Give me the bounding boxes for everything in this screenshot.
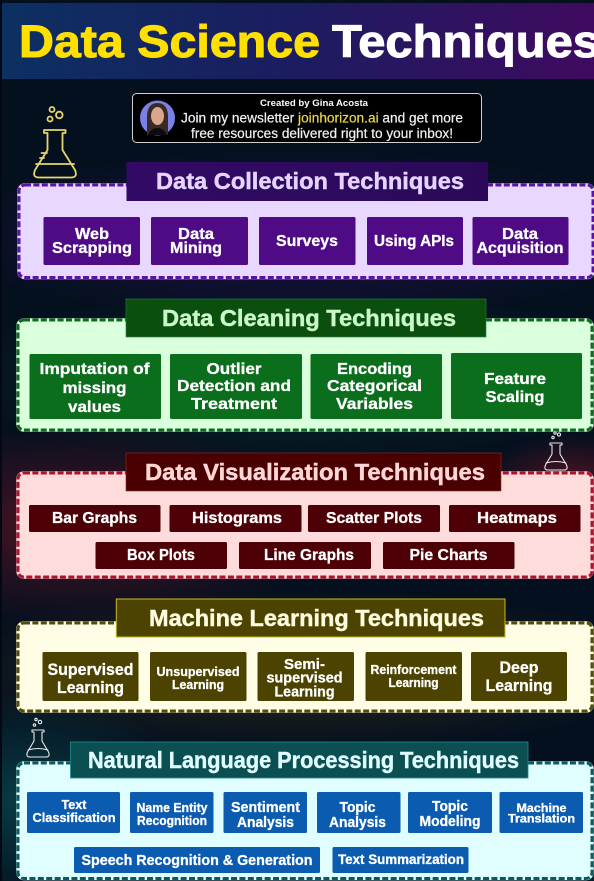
heading: machine learning: Machine Learning Techniques [149,605,484,631]
item: data mining [151,217,248,265]
item: feature scaling: Feature [484,371,546,388]
heading: machine learning [116,599,505,637]
item: feature scaling [451,353,582,419]
item: topic modeling: Topic [432,799,468,815]
item: box plots [96,542,227,569]
icon: white flask left [27,718,49,757]
item: pie charts: Pie Charts [410,547,488,564]
item: outlier detection: Detection and [177,378,291,395]
heading: data collection: Data Collection Techniques [156,168,464,194]
item: heatmaps: Heatmaps [477,510,557,527]
item: reinforcement learning [366,652,462,701]
item: imputation: values [68,399,121,416]
item: feature scaling: Scaling [486,389,544,406]
item: imputation [30,354,161,419]
heading: data cleaning [126,299,486,337]
item: using apis [367,217,463,265]
item: semi-supervised learning: Semi- [284,656,325,673]
title second word: Techniques [332,16,594,67]
item: text classification: Classification [32,810,116,825]
item: sentiment analysis: Analysis [237,815,294,831]
item: name entity recognition [130,792,214,833]
icon: yellow flask [34,107,76,178]
item: web scrapping: Web [75,226,109,243]
item: line graphs [239,542,371,569]
item: heatmaps [449,505,580,532]
item: encoding [310,354,442,419]
item: supervised learning: Supervised [48,660,134,679]
item: bar graphs: Bar Graphs [52,510,137,527]
item: encoding: Categorical [327,378,422,395]
heading: natural language processing [70,742,528,778]
item: scatter plots: Scatter Plots [326,510,422,527]
item: scatter plots [308,505,440,532]
item: data mining: Data [178,226,214,243]
item: web scrapping [44,217,140,265]
item: unsupervised learning: Unsupervised [156,664,240,679]
item: text classification [27,792,120,833]
item: sentiment analysis: Sentiment [231,800,300,816]
item: speech recognition and generation: Speech Recognition & Generation [82,852,312,869]
item: machine translation: Machine [516,801,567,815]
icon: author portrait [140,100,175,136]
item: data mining: Mining [170,240,222,257]
item: text summarization [332,847,468,873]
item: line graphs: Line Graphs [264,547,354,564]
item: bar graphs [29,505,160,532]
item: sentiment analysis [224,792,307,833]
item: name entity recognition: Recognition [137,814,207,828]
item: text summarization: Text Summarization [338,852,464,867]
item: encoding: Encoding [337,361,412,378]
panel: machine learning [18,599,592,711]
item: data acquisition: Acquisition [476,240,564,257]
item: unsupervised learning [150,652,246,701]
item: topic modeling [408,792,492,833]
panel: data visualization [18,453,592,577]
item: data acquisition: Data [502,226,538,243]
item: topic analysis: Analysis [329,815,386,831]
item: deep learning [471,652,567,701]
icon: white flask right [545,432,567,470]
item: web scrapping: Scrapping [52,240,132,257]
item: supervised learning: Learning [57,678,124,697]
item: topic modeling: Modeling [420,814,480,830]
item: supervised learning [42,652,138,701]
item: outlier detection [170,354,302,419]
item: topic analysis: Topic [340,800,376,816]
item: deep learning: Deep [500,658,538,677]
item: machine translation [500,792,583,833]
item: box plots: Box Plots [127,547,195,564]
panel: data cleaning [18,299,592,430]
item: semi-supervised learning: Learning [274,684,334,700]
heading: natural language processing: Natural Language Processing Techniques [88,747,519,773]
item: text classification: Text [62,797,87,812]
heading: data visualization [126,453,501,491]
item: semi-supervised learning: supervised [266,670,342,686]
item: name entity recognition: Name Entity [136,801,208,815]
item: semi-supervised learning [258,652,354,701]
item: reinforcement learning: Learning [388,676,438,690]
item: outlier detection: Treatment [191,396,278,413]
item: outlier detection: Outlier [206,361,262,378]
item: imputation: Imputation of [40,361,150,378]
item: speech recognition and generation [74,847,320,873]
heading: data visualization: Data Visualization Techniques [145,459,485,485]
panel: data collection [19,162,593,278]
item: reinforcement learning: Reinforcement [370,663,457,677]
item: topic analysis [317,792,400,833]
item: surveys [259,217,356,265]
item: deep learning: Learning [486,676,552,695]
newsletter card [132,94,482,142]
item: using apis: Using APIs [374,233,454,250]
item: imputation: missing [62,380,126,397]
item: histograms [170,505,302,532]
panel: natural language processing [18,742,592,878]
credit line: Created by Gina Acosta [260,98,369,109]
heading: data collection [126,162,488,201]
newsletter line one: Join my newsletter joinhorizon.ai and get more [181,110,463,126]
title: Data Science [19,16,320,67]
item: data acquisition [472,217,568,265]
newsletter line two: free resources delivered right to your inbox! [191,126,453,141]
item: unsupervised learning: Learning [172,677,224,692]
title banner [2,3,594,79]
item: surveys: Surveys [276,233,338,250]
item: encoding: Variables [336,396,413,413]
item: machine translation: Translation [508,812,575,826]
item: pie charts [383,542,514,569]
heading: data cleaning: Data Cleaning Techniques [162,305,456,331]
item: histograms: Histograms [192,510,282,527]
